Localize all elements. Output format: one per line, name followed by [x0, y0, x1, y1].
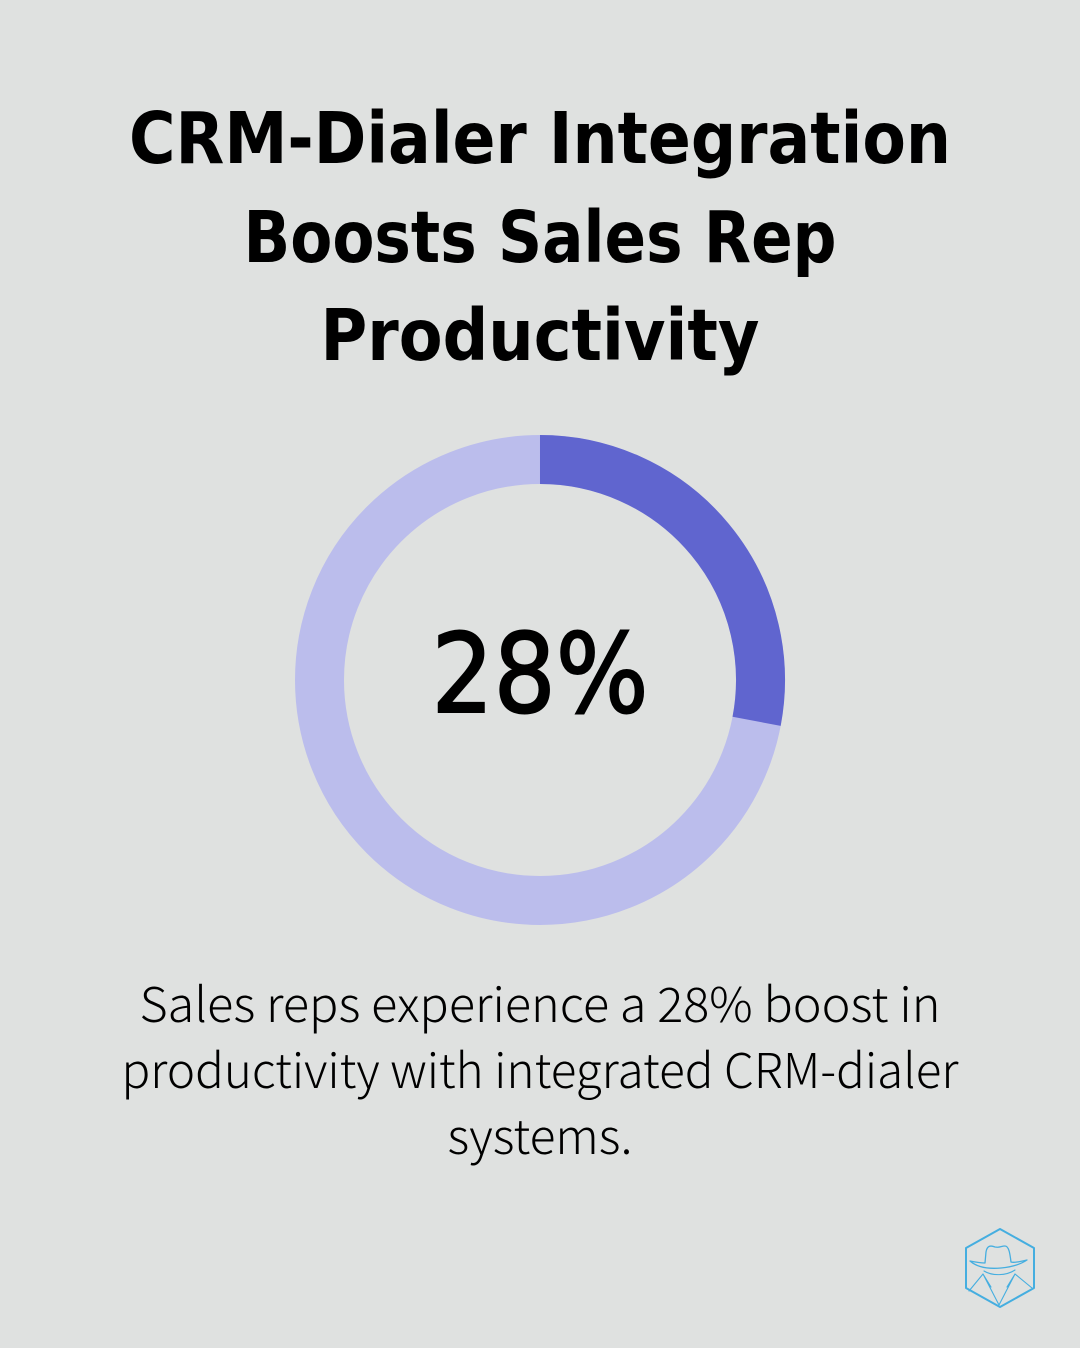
title: CRM-Dialer Integration: [129, 97, 951, 180]
donut value: 28%: [432, 610, 648, 738]
icon: spy logo hexagon: [966, 1229, 1034, 1307]
title: Productivity: [320, 294, 760, 377]
description: [122, 966, 959, 1168]
title: Boosts Sales Rep: [244, 196, 836, 279]
description: Sales reps experience a 28% boost in: [140, 966, 940, 1036]
title: [129, 97, 951, 377]
description: systems.: [448, 1098, 632, 1168]
donut chart: 28%: [320, 460, 761, 900]
description: productivity with integrated CRM-dialer: [122, 1032, 959, 1102]
